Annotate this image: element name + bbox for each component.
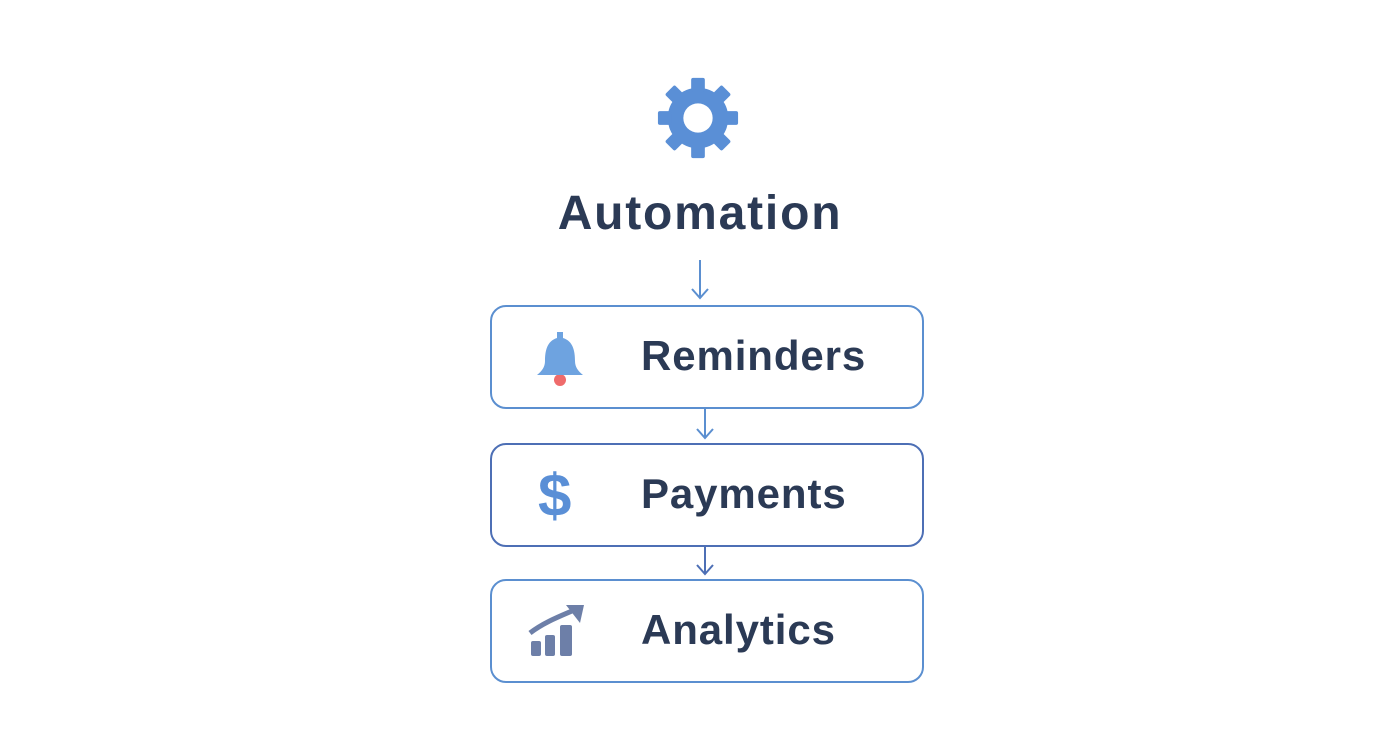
arrow 1 — [691, 260, 709, 300]
arrow 2 — [696, 409, 714, 440]
panel: reminders — [490, 305, 924, 409]
icon: gear — [658, 78, 738, 158]
panel: analytics — [490, 579, 924, 683]
arrow 3 — [696, 547, 714, 576]
title: Automation — [558, 187, 842, 240]
icon: dollar: $ — [538, 462, 571, 529]
label: Reminders: Reminders — [641, 332, 866, 379]
icon: chart — [528, 605, 584, 656]
panel: payments — [490, 443, 924, 547]
label: Payments: Payments — [641, 470, 847, 517]
label: Analytics: Analytics — [641, 606, 836, 653]
icon: bell — [537, 332, 583, 386]
